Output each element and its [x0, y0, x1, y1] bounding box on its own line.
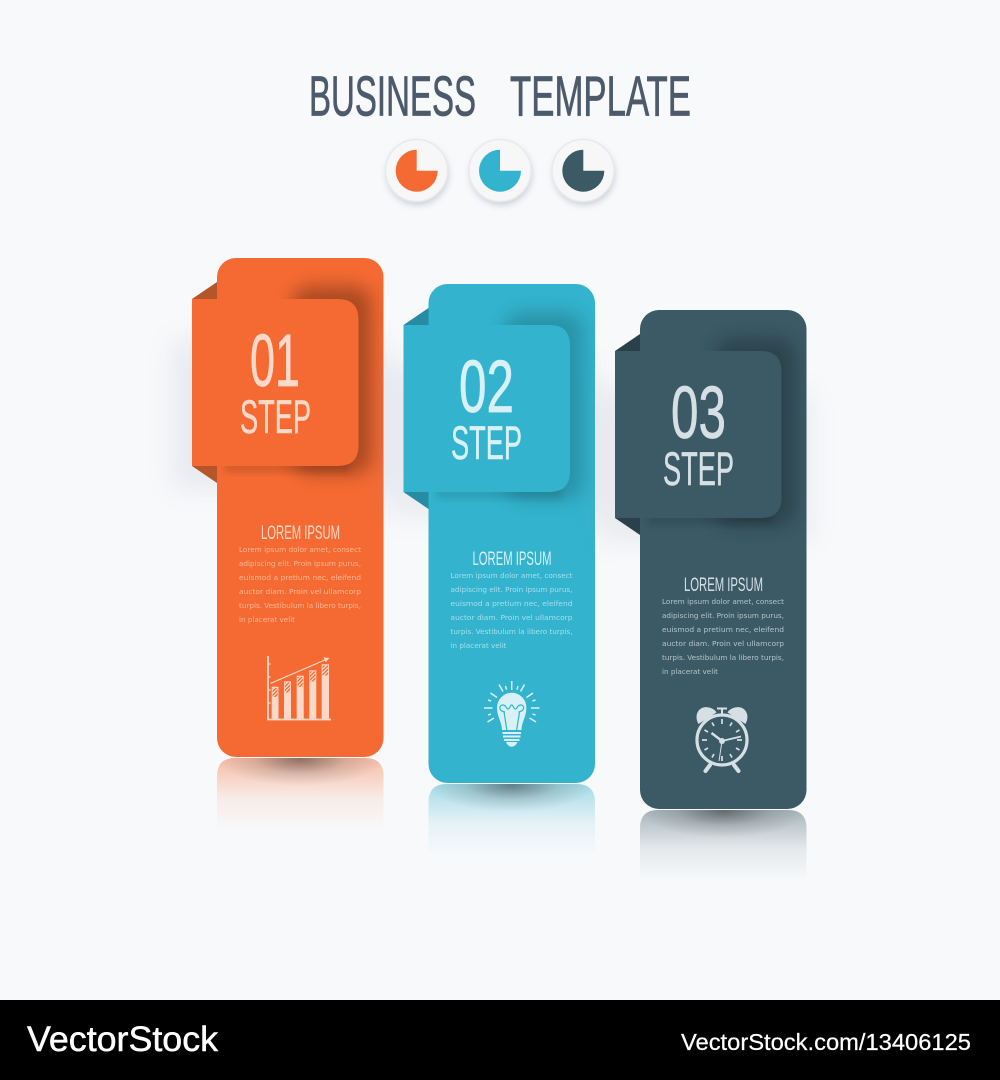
panel: step 03	[596, 310, 811, 882]
body text: adipiscing elit. Proin ipsum purus,	[239, 559, 361, 568]
outer shadow	[384, 366, 599, 516]
icon: alarm clock	[697, 707, 747, 771]
fold	[615, 334, 640, 535]
body text: Lorem ipsum dolor amet, consect	[450, 571, 573, 580]
body text: Lorem ipsum dolor amet, consect	[239, 545, 361, 554]
body text: euismod a pretium nec, eleifend	[450, 599, 572, 608]
heading: LOREM IPSUM	[472, 548, 552, 570]
card body	[217, 258, 384, 757]
icon: slate pie	[552, 140, 615, 205]
icon: orange pie	[386, 140, 448, 205]
reflection 01	[217, 758, 384, 816]
body text: turpis. Vestibulum la libero turpis,	[239, 601, 361, 610]
icon: blue pie	[469, 140, 532, 205]
heading: LOREM IPSUM	[261, 522, 340, 544]
body text: in placerat velit	[450, 641, 507, 650]
body text: euismod a pretium nec, eleifend	[239, 573, 361, 582]
number: 03	[671, 371, 726, 454]
card body	[428, 284, 595, 783]
fold	[404, 308, 428, 509]
tab	[615, 351, 782, 518]
body text: auctor diam. Proin vel ullamcorp	[662, 639, 784, 648]
number: 01	[250, 319, 300, 402]
outer shadow	[172, 340, 387, 490]
footer bar	[0, 1000, 1000, 1080]
body text: adipiscing elit. Proin ipsum purus,	[450, 585, 572, 594]
step label: STEP	[451, 416, 522, 469]
body text: adipiscing elit. Proin ipsum purus,	[662, 611, 784, 620]
body text: turpis. Vestibulum la libero turpis,	[450, 627, 572, 636]
panel: step 02	[384, 284, 599, 856]
body text: auctor diam. Proin vel ullamcorp	[450, 613, 573, 622]
heading: LOREM IPSUM	[684, 574, 763, 596]
card body	[640, 310, 806, 809]
reflection 02	[428, 784, 595, 842]
footer url: VectorStock.com/13406125	[681, 1029, 971, 1055]
pie icons row	[386, 140, 615, 205]
body text: euismod a pretium nec, eleifend	[662, 625, 784, 634]
outer shadow	[596, 392, 811, 542]
tab	[192, 299, 358, 466]
body text	[450, 571, 573, 650]
title: TEMPLATE	[510, 64, 691, 128]
footer logo: VectorStock	[27, 1020, 219, 1059]
step label: STEP	[663, 442, 734, 495]
panel: step 01	[172, 258, 387, 830]
body text: in placerat velit	[662, 667, 718, 676]
body text: Lorem ipsum dolor amet, consect	[662, 597, 784, 606]
tab	[404, 325, 570, 492]
body text	[239, 545, 361, 624]
body text: in placerat velit	[239, 615, 295, 624]
step label: STEP	[240, 390, 311, 443]
reflection 03	[640, 810, 806, 868]
fold	[192, 282, 217, 483]
title: BUSINESS	[309, 64, 476, 128]
number: 02	[459, 345, 514, 428]
icon: light bulb	[484, 681, 540, 747]
body text: auctor diam. Proin vel ullamcorp	[239, 587, 361, 596]
body text	[662, 597, 784, 676]
body text: turpis. Vestibulum la libero turpis,	[662, 653, 784, 662]
icon: bar chart	[268, 656, 331, 720]
